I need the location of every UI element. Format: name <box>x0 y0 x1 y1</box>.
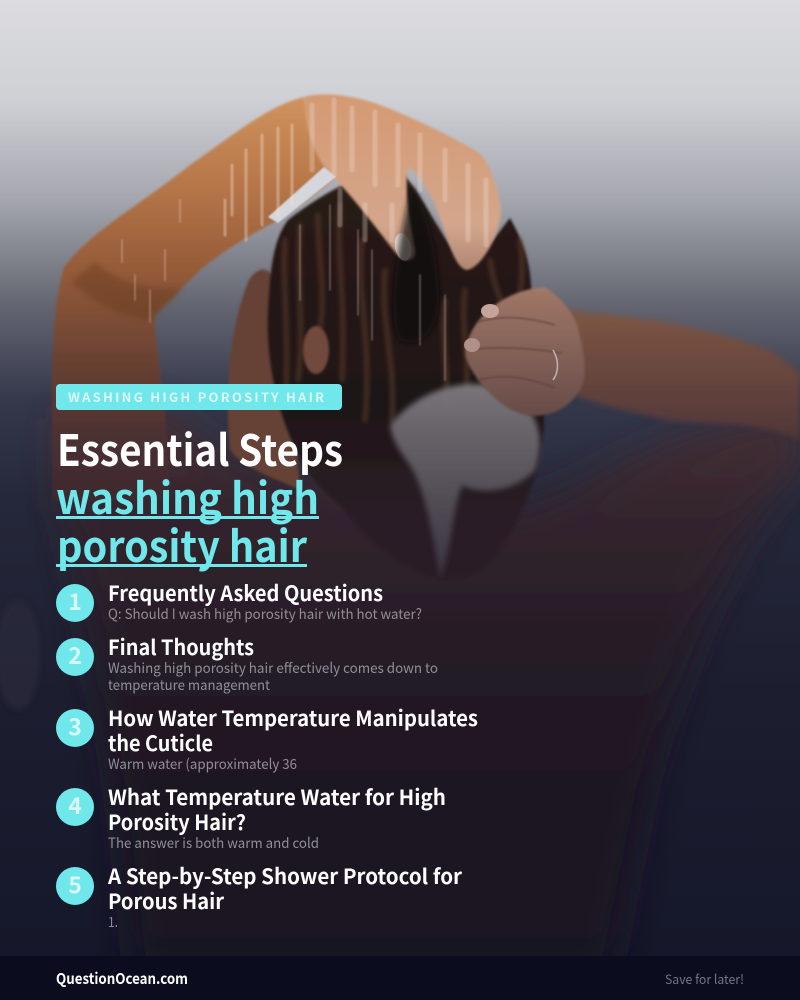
shower head silhouette <box>0 600 40 710</box>
tag pill <box>56 384 342 410</box>
step 2: temperature management <box>108 675 271 695</box>
far arm <box>565 310 800 440</box>
face and neck edge <box>228 270 300 490</box>
brand: QuestionOcean.com <box>56 968 188 989</box>
step 3: How Water Temperature Manipulates <box>108 703 478 733</box>
step 3: 3 <box>68 708 82 742</box>
footer bar <box>0 956 800 1000</box>
save note: Save for later! <box>665 969 744 988</box>
finger lines and nails <box>392 232 562 388</box>
step 4: Porosity Hair? <box>108 807 246 837</box>
step 2: 2 <box>68 637 82 671</box>
title: washing high <box>56 465 319 527</box>
step 2 <box>56 632 438 695</box>
elbow crease shadow <box>72 262 182 320</box>
title <box>56 417 343 575</box>
ear <box>303 326 329 374</box>
raised arm <box>52 97 336 500</box>
step 5: 5 <box>68 866 82 900</box>
step 4: What Temperature Water for High <box>108 782 446 812</box>
title: porosity hair <box>57 513 307 575</box>
step 5 <box>56 861 463 932</box>
back and shoulders <box>60 410 800 980</box>
step 1 <box>56 578 422 624</box>
step 2: Final Thoughts <box>108 632 254 662</box>
step 1: 1 <box>68 583 82 617</box>
step 3 <box>56 703 478 774</box>
dark hair shadows <box>393 185 439 342</box>
step 5: A Step-by-Step Shower Protocol for <box>107 861 463 891</box>
step 3: the Cuticle <box>108 728 213 758</box>
brown hair strands <box>284 205 522 420</box>
raised hand <box>304 94 501 270</box>
step 1: Q: Should I wash high porosity hair with hot water? <box>108 604 422 624</box>
white gap between arm and head <box>268 167 336 223</box>
step 2: Washing high porosity hair effectively comes down to <box>108 658 438 678</box>
step 5: Porous Hair <box>108 886 225 916</box>
water streaks <box>122 100 486 380</box>
hair <box>268 168 544 582</box>
step 3: Warm water (approximately 36 <box>108 754 297 774</box>
step 4: The answer is both warm and cold <box>108 833 319 853</box>
steps list <box>56 578 478 932</box>
step 5: 1. <box>108 912 118 932</box>
step 1: Frequently Asked Questions <box>108 578 383 608</box>
foam <box>390 384 540 578</box>
title: Essential Steps <box>57 417 343 479</box>
step 4 <box>56 782 446 853</box>
tag pill: WASHING HIGH POROSITY HAIR <box>68 387 324 406</box>
second hand <box>465 287 585 416</box>
step 4: 4 <box>68 787 82 821</box>
